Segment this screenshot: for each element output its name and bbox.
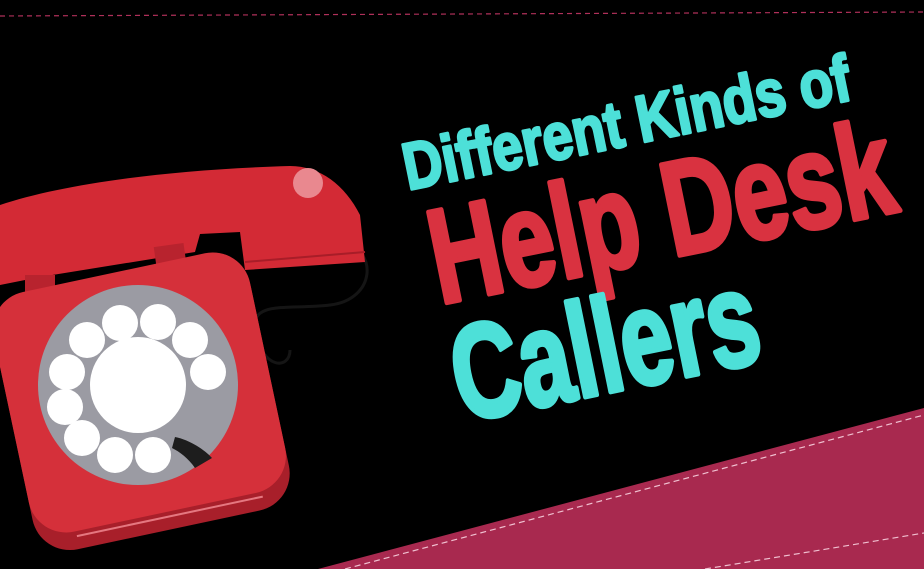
cord bbox=[255, 240, 367, 363]
icon: red telephone bbox=[0, 166, 367, 557]
dial bbox=[38, 285, 238, 485]
title line 3: Callers bbox=[438, 243, 772, 450]
cradle posts bbox=[25, 275, 55, 295]
base bbox=[0, 245, 297, 557]
handset bbox=[0, 166, 365, 285]
title bbox=[396, 40, 907, 450]
magenta band bbox=[318, 408, 924, 569]
